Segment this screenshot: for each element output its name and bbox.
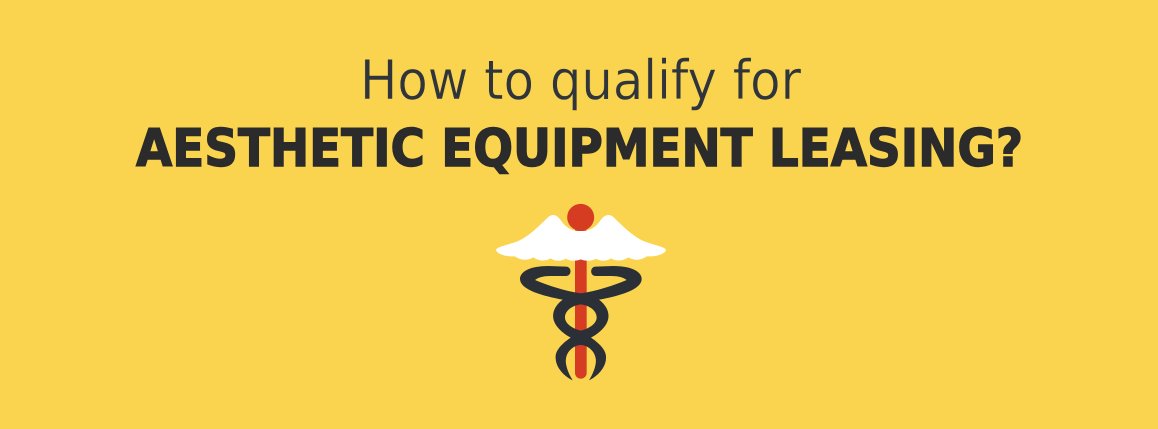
icon part: rod and ball [567,204,594,379]
icon: caduceus [496,204,666,380]
icon part: snakes [520,266,642,380]
icon part: wings [496,215,666,261]
title line 1: How to qualify for [360,49,802,112]
title line 2: AESTHETIC EQUIPMENT LEASING? [136,119,1023,179]
